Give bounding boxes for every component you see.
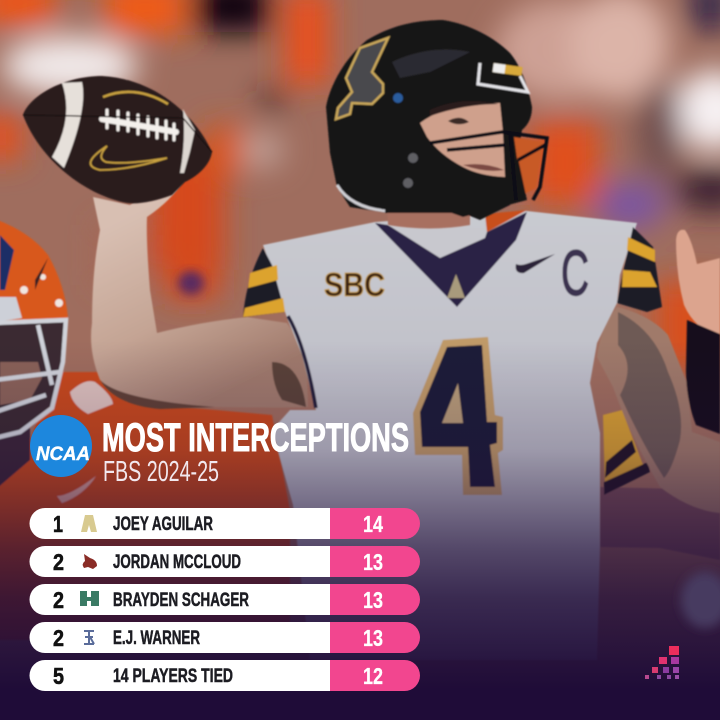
purple spot behind arm xyxy=(178,271,204,295)
opponent player in orange xyxy=(0,219,290,640)
left sleeve stripes xyxy=(243,248,285,317)
ball white stripes xyxy=(52,82,83,168)
leaderboard row 3: 13 xyxy=(363,587,383,613)
right sleeve stripes xyxy=(617,227,662,312)
leaderboard row 5: 12 xyxy=(363,663,383,689)
captain C: C xyxy=(561,237,589,309)
leaderboard row 5 xyxy=(29,660,420,691)
leaderboard row 3 xyxy=(29,584,420,615)
dark purple bottom fade xyxy=(0,340,720,720)
NCAA logo: NCAA xyxy=(36,444,90,465)
facemask xyxy=(430,132,547,200)
NCAA logo xyxy=(30,415,92,477)
eye xyxy=(448,118,469,124)
raised hand xyxy=(676,230,720,336)
helmet logo xyxy=(336,38,388,119)
quarterback helmet and face xyxy=(326,20,547,228)
armhole piping xyxy=(288,316,316,408)
leaderboard row 4: 13 xyxy=(363,625,383,651)
subtitle: FBS 2024-25 xyxy=(103,456,219,488)
chin edge xyxy=(337,185,385,211)
opponent swoosh xyxy=(57,476,96,503)
leaderboard row 3: 2 xyxy=(53,587,64,613)
helmet shell xyxy=(326,20,532,220)
ball swoosh logos xyxy=(103,92,168,104)
leaderboard row 4 xyxy=(29,622,420,653)
leaderboard row 3: BRAYDEN SCHAGER xyxy=(113,590,249,611)
jaw guard xyxy=(415,150,527,217)
face xyxy=(420,103,505,177)
forearm xyxy=(597,307,720,513)
SBC patch: SBC xyxy=(324,266,385,303)
elbow shadow xyxy=(272,362,306,407)
orange gap at collar xyxy=(485,210,527,232)
leaderboard row 2: 2 xyxy=(53,549,64,575)
leaderboard row 1: 14 xyxy=(363,511,383,537)
opponent paw logo xyxy=(70,381,113,414)
leaderboard row 5: 5 xyxy=(53,663,64,689)
title: MOST INTERCEPTIONS xyxy=(102,416,409,460)
gold and black sleeve behind xyxy=(603,410,645,490)
lower right grey-purple blur xyxy=(681,572,720,628)
undershirt xyxy=(388,225,486,258)
team logo: Texas State xyxy=(83,554,97,569)
helmet snaps xyxy=(408,153,418,163)
leaderboard row 2: JORDAN MCCLOUD xyxy=(113,552,241,573)
helmet sheen xyxy=(392,50,470,78)
mouth xyxy=(463,164,504,171)
nike swoosh xyxy=(516,254,555,273)
brow shadow xyxy=(430,101,498,116)
wristband xyxy=(686,320,720,434)
orange through facemask xyxy=(514,137,543,195)
brand mark: stepped squares xyxy=(645,646,679,679)
ball laces xyxy=(102,110,176,140)
leaderboard row 5: 14 PLAYERS TIED xyxy=(113,666,233,687)
teammate arm behind xyxy=(600,487,720,560)
football xyxy=(23,76,212,203)
leaderboard row 1: JOEY AGUILAR xyxy=(113,514,213,535)
jersey number 4 xyxy=(413,337,503,495)
quarterback jersey xyxy=(243,210,662,660)
leaderboard row 1: 1 xyxy=(53,511,63,537)
leaderboard row 2: 13 xyxy=(363,549,383,575)
helmet decal band xyxy=(478,63,528,92)
team logo: Hawaii xyxy=(80,591,99,606)
opponent face behind facemask xyxy=(0,320,66,438)
collar V xyxy=(375,212,527,307)
leaderboard row 4: E.J. WARNER xyxy=(113,628,200,649)
opponent jersey xyxy=(0,372,290,640)
neck xyxy=(387,205,470,228)
team logo: Appalachian State xyxy=(81,515,97,532)
helmet blue dot xyxy=(393,93,403,103)
leaderboard row 2 xyxy=(29,546,420,577)
team logo: Rice xyxy=(84,631,94,644)
logo on collar xyxy=(447,274,465,298)
tattoo xyxy=(618,312,681,478)
leaderboard row 4: 2 xyxy=(53,625,64,651)
opponent helmet xyxy=(0,219,68,325)
quarterback throwing arm and hand xyxy=(91,153,308,409)
leaderboard row 1 xyxy=(29,508,420,539)
opposing arm with tattoo, wristband and raised hand xyxy=(597,230,720,560)
opponent facemask xyxy=(0,320,66,438)
